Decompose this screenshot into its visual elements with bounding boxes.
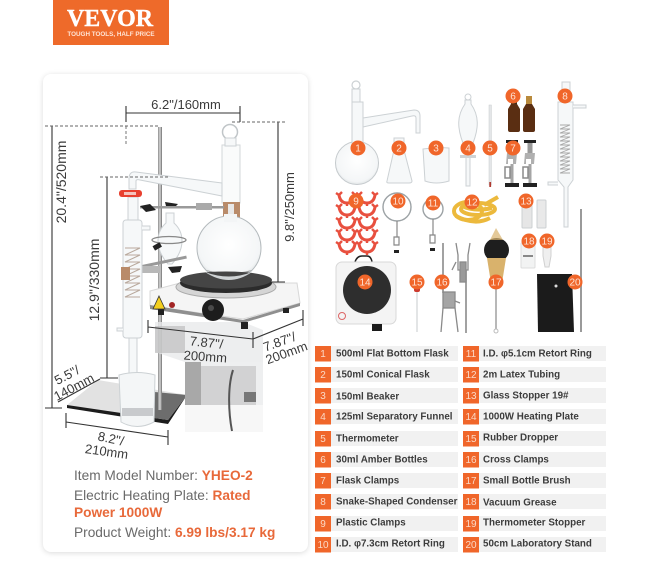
parts list: left column: 5 xyxy=(320,434,326,445)
dimension: 7.87"/200mm side xyxy=(253,310,309,367)
parts list: left column: 500ml Flat Bottom Flask xyxy=(336,348,449,360)
product specifications: Electric Heating Plate: Rated xyxy=(74,488,250,503)
dimension: 7.87"/200mm side: 7.87"/ xyxy=(261,329,298,355)
product specifications: Item Model Number: YHEO-2 xyxy=(74,468,253,483)
laboratory stand base xyxy=(67,380,187,424)
part number badges: 2 xyxy=(396,144,402,154)
part 9: plastic clamps xyxy=(336,192,378,255)
dimension: 9.8"/250mm: 9.8"/250mm xyxy=(282,172,297,242)
logo: VEVOR: TOUGH TOOLS, HALF PRICE xyxy=(67,31,155,38)
product specifications: Power 1000W xyxy=(74,505,162,520)
parts list: right column: 1000W Heating Plate xyxy=(483,412,579,422)
dimension: 8.2"/210mm: 210mm xyxy=(84,441,129,462)
dimension: 20.4"/520mm: 20.4"/520mm xyxy=(53,141,69,223)
panel: included parts xyxy=(336,81,586,333)
part 13: glass stoppers xyxy=(522,200,546,228)
parts list: right column: 13 xyxy=(465,391,477,402)
parts list: right column: Rubber Dropper xyxy=(483,432,558,444)
dimension: 5.5"/140mm: 140mm xyxy=(51,370,97,404)
product specifications: Product Weight: 6.99 lbs/3.17 kg xyxy=(74,525,275,540)
horizontal clamp rods xyxy=(135,202,224,273)
parts list: left column: Plastic Clamps xyxy=(336,518,406,528)
part number badges: 4 xyxy=(465,144,471,154)
part 8: condenser xyxy=(548,82,586,227)
parts list: left column: I.D. φ7.3cm Retort Ring xyxy=(336,538,445,550)
dimension: 7.87"/200mm front: 7.87"/ xyxy=(189,333,224,352)
part 2: conical flask xyxy=(387,138,412,183)
part 5: thermometer xyxy=(489,105,491,187)
parts list: right column: 50cm Laboratory Stand xyxy=(483,538,592,550)
parts list: right column: 19 xyxy=(465,519,477,530)
part number badges: 10 xyxy=(392,196,404,208)
dimension: 7.87"/200mm front: 200mm xyxy=(183,348,227,366)
part number badges: 16 xyxy=(436,278,448,288)
parts list: right column: Cross Clamps xyxy=(483,454,549,466)
part 17: bottle brush xyxy=(484,228,509,333)
part number badges: 13 xyxy=(520,196,532,208)
dimension: 8.2"/210mm xyxy=(66,413,168,462)
part 3: beaker xyxy=(423,148,449,183)
dimension: 12.9"/330mm xyxy=(86,177,168,378)
dimension: 8.2"/210mm: 8.2"/ xyxy=(97,429,126,449)
part number badges: 6 xyxy=(510,92,516,102)
parts list: right column: I.D. φ5.1cm Retort Ring xyxy=(483,348,592,360)
part 19: thermometer stopper xyxy=(543,247,551,267)
dimension: 7.87"/200mm side: 200mm xyxy=(264,338,309,367)
parts list: left column: Snake-Shaped Condenser xyxy=(336,496,458,508)
parts list: left column: 8 xyxy=(320,497,326,508)
logo: VEVOR: VEVOR xyxy=(67,6,154,32)
part 15: rubber dropper xyxy=(414,281,420,332)
part number badges: 20 xyxy=(569,278,581,288)
parts list: left column: 2 xyxy=(320,370,326,381)
part 18: vacuum grease xyxy=(521,243,535,268)
part 7: flask clamps xyxy=(505,140,537,187)
parts list: right column: 14 xyxy=(465,412,477,423)
parts list: right column: 16 xyxy=(465,455,477,466)
logo: VEVOR xyxy=(53,0,169,45)
part 16: cross clamps xyxy=(441,243,470,333)
parts list: right column: 17 xyxy=(465,476,477,487)
parts list: right column: Glass Stopper 19# xyxy=(483,390,569,402)
parts list: right column xyxy=(463,346,606,552)
part 12: latex tubing xyxy=(454,197,498,222)
dimension: 20.4"/520mm xyxy=(45,126,160,408)
parts list: left column: Flask Clamps xyxy=(336,476,400,486)
part 1: flat bottom flask xyxy=(336,81,420,184)
dimension: 7.87"/200mm front xyxy=(148,320,253,366)
part number badges: 17 xyxy=(490,278,502,288)
parts list: right column: 12 xyxy=(465,370,477,381)
distillation flask xyxy=(129,124,261,280)
parts list: right column: Vacuum Grease xyxy=(483,498,557,508)
dimension: 9.8"/250mm xyxy=(232,122,297,282)
part 20: laboratory stand xyxy=(537,209,582,332)
part 10: retort ring xyxy=(383,193,411,253)
separatory funnel behind stand xyxy=(152,213,186,264)
part number badges: 11 xyxy=(428,198,439,210)
part 6: amber bottles xyxy=(508,96,535,132)
part number badges: 18 xyxy=(523,236,535,248)
dimension: 5.5"/140mm: 5.5"/ xyxy=(52,362,82,388)
parts list: left column: 125ml Separatory Funnel xyxy=(336,412,453,422)
product specifications xyxy=(74,468,275,540)
part 14: heating plate xyxy=(336,256,396,331)
parts list: right column: 20 xyxy=(465,540,477,551)
part number badges: 5 xyxy=(487,144,493,154)
beaker xyxy=(119,372,155,426)
panel: product dimensions xyxy=(43,74,309,553)
parts list: right column: 11 xyxy=(466,349,477,360)
part 4: separatory funnel xyxy=(459,94,477,186)
parts list: left column: 10 xyxy=(317,540,329,551)
part number badges: 1 xyxy=(355,144,361,154)
parts list: right column: Small Bottle Brush xyxy=(483,476,571,486)
parts list: left column: 150ml Beaker xyxy=(336,392,399,402)
part number badges: 9 xyxy=(353,196,359,208)
parts list: left column: 9 xyxy=(320,519,326,530)
parts list: left column: 3 xyxy=(320,391,326,402)
parts list: left column: 1 xyxy=(320,349,326,360)
part number badges: 12 xyxy=(466,198,478,208)
parts list: left column: 150ml Conical Flask xyxy=(336,370,430,380)
part 11: retort ring xyxy=(423,199,443,251)
parts list: left column: Thermometer xyxy=(336,434,399,444)
snake-shaped condenser xyxy=(117,190,150,378)
part number badges: 8 xyxy=(562,92,568,102)
part number badges: 15 xyxy=(411,278,423,288)
part number badges: 3 xyxy=(433,144,439,154)
parts list: right column: Thermometer Stopper xyxy=(483,518,586,528)
parts list: right column: 18 xyxy=(465,497,477,508)
part number badges: 19 xyxy=(541,236,553,248)
parts list: left column: 6 xyxy=(320,455,326,466)
parts list: left column xyxy=(315,346,458,552)
part number badges: 7 xyxy=(510,144,516,154)
parts list: left column: 7 xyxy=(320,476,326,487)
heating plate xyxy=(150,272,300,329)
parts list: right column: 2m Latex Tubing xyxy=(483,370,560,380)
part number badges xyxy=(348,88,582,290)
parts list: left column: 4 xyxy=(320,412,326,423)
parts list: right column: 15 xyxy=(465,434,477,445)
dimension: 12.9"/330mm: 12.9"/330mm xyxy=(86,239,102,321)
stand rod xyxy=(158,127,162,410)
parts list: left column: 30ml Amber Bottles xyxy=(336,454,428,466)
acrylic support block xyxy=(155,322,263,432)
dimension: 6.2"/160mm: 6.2"/160mm xyxy=(151,97,221,112)
part number badges: 14 xyxy=(359,278,371,288)
dimension: 6.2"/160mm xyxy=(126,97,240,122)
